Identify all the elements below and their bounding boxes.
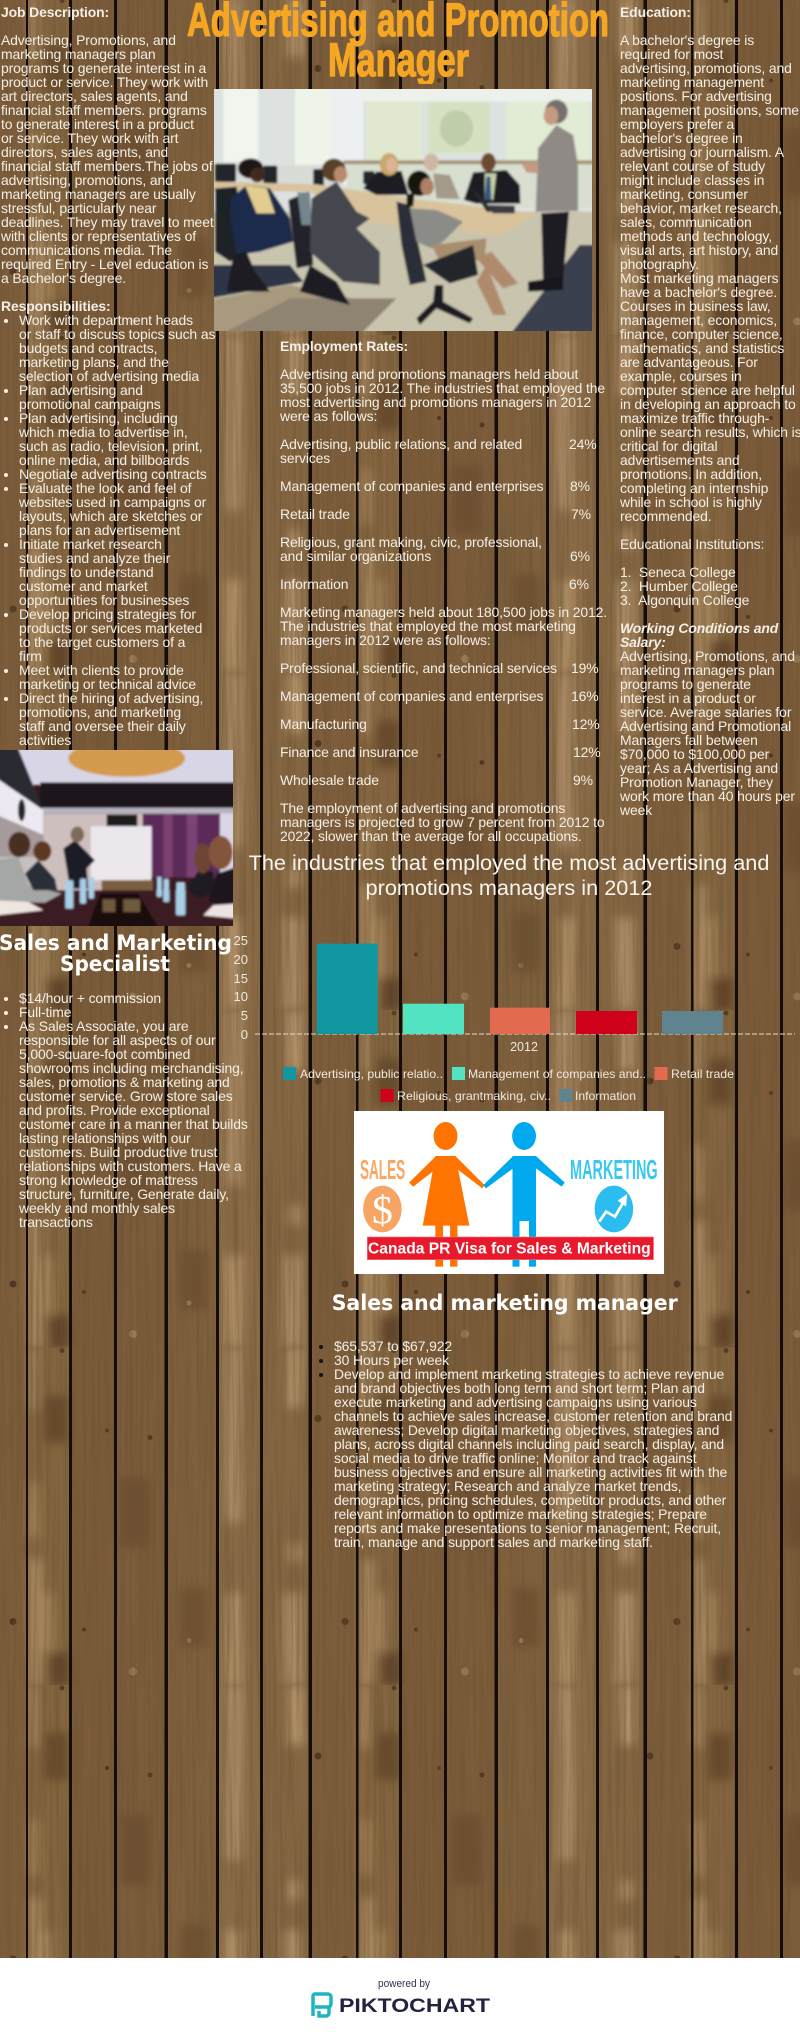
footer: powered by Piktochart: PIKTOCHART bbox=[339, 1995, 490, 2017]
heading: Sales and Marketing Specialist bbox=[0, 931, 232, 976]
seated older woman bbox=[424, 154, 460, 199]
left column: job description: product or service. They work with bbox=[1, 74, 208, 90]
table: marketing managers by industry: 12% bbox=[572, 716, 600, 732]
sales and marketing specialist details: lasting relationships with our bbox=[19, 1130, 190, 1146]
left column: responsibilities: such as radio, television, print, bbox=[19, 438, 203, 454]
left column: responsibilities: staff and oversee their daily bbox=[19, 718, 186, 734]
table: advertising and promotions managers by industry: 6% bbox=[569, 576, 589, 592]
left column: job description: financial staff members. programs bbox=[1, 102, 207, 118]
right column: education, institutions, working conditions: bachelor's degree in bbox=[620, 130, 743, 146]
bar chart: 2012 bbox=[510, 1040, 538, 1054]
sales and marketing specialist details: customers. Build productive trust bbox=[19, 1144, 217, 1160]
left column: responsibilities: budgets and contracts, bbox=[19, 340, 157, 356]
table: marketing managers by industry bbox=[280, 660, 601, 788]
seated woman in navy bbox=[215, 158, 293, 292]
photo: conference room presentation bbox=[0, 750, 233, 926]
image: sales and marketing figures bbox=[354, 1111, 664, 1274]
right column: education, institutions, working conditions: methods and technology, bbox=[620, 228, 772, 244]
sales and marketing specialist details: relationships with customers. Have a bbox=[19, 1158, 242, 1174]
table: marketing managers by industry: Professional, scientific, and technical services bbox=[280, 660, 557, 676]
right column: education, institutions, working conditions: while in school is highly bbox=[620, 494, 762, 510]
right column: education, institutions, working conditions: photography. bbox=[620, 256, 699, 272]
right column: education, institutions, working conditions: marketing, consumer bbox=[620, 186, 748, 202]
right column: education, institutions, working conditions: interest in a product or bbox=[620, 690, 756, 706]
left column: job description: Advertising, Promotions, and bbox=[1, 32, 176, 48]
left column: job description: advertising, promotions, and bbox=[1, 172, 173, 188]
sales and marketing specialist details bbox=[4, 990, 248, 1230]
right column: education, institutions, working conditions: $70,000 to $100,000 per bbox=[620, 746, 769, 762]
right column: education, institutions, working conditions: positions. For advertising bbox=[620, 88, 772, 104]
left column: job description: directors, sales agents, and bbox=[1, 144, 168, 160]
right column: education, institutions, working conditions: promotions. In addition, bbox=[620, 466, 762, 482]
right column: education, institutions, working conditions: computer science are helpful bbox=[620, 382, 795, 398]
sales and marketing manager details: execute marketing and advertising campaigns using various bbox=[334, 1394, 697, 1410]
right column: education, institutions, working conditions: relevant course of study bbox=[620, 158, 765, 174]
table: marketing managers by industry: Manufacturing bbox=[280, 716, 367, 732]
left column: responsibilities bbox=[1, 298, 215, 748]
middle column: marketing managers paragraph bbox=[280, 604, 607, 648]
left column: responsibilities: Meet with clients to provide bbox=[19, 662, 184, 678]
right column: education, institutions, working conditions: sales, communication bbox=[620, 214, 752, 230]
sales and marketing specialist details: Full-time bbox=[19, 1004, 71, 1020]
right column: education, institutions, working conditions: example, courses in bbox=[620, 368, 742, 384]
sales and marketing manager details: awareness; Develop digital marketing objectives, strategies and bbox=[334, 1422, 719, 1438]
seated woman in stripes bbox=[397, 171, 518, 325]
table: marketing managers by industry: 19% bbox=[571, 660, 599, 676]
sales and marketing specialist details: customer care in a manner that builds bbox=[19, 1116, 248, 1132]
right column: education, institutions, working conditions: service. Average salaries for bbox=[620, 704, 791, 720]
seated blonde woman bbox=[363, 153, 409, 195]
right column: education, institutions, working conditions: marketing managers plan bbox=[620, 662, 775, 678]
bar chart: 10 bbox=[234, 989, 248, 1004]
sales and marketing manager details: marketing strategy; Research and analyze market trends, bbox=[334, 1478, 681, 1494]
right column: education, institutions, working conditions: management, economics, bbox=[620, 312, 777, 328]
seated man in gray suit bbox=[288, 159, 380, 305]
footer: powered by Piktochart: powered by bbox=[378, 1978, 430, 1990]
left column: responsibilities: activities bbox=[19, 732, 71, 748]
left column: job description: marketing managers plan bbox=[1, 46, 156, 62]
sales and marketing specialist details: weekly and monthly sales bbox=[19, 1200, 175, 1216]
middle column: employment rates intro: Employment Rates: bbox=[280, 338, 408, 354]
left column: responsibilities: or staff to discuss topics such as bbox=[19, 326, 215, 342]
left column: responsibilities: promotions, and marketing bbox=[19, 704, 181, 720]
sales and marketing manager details: channels to achieve sales increase, customer retention and brand bbox=[334, 1408, 732, 1424]
middle column: employment rates intro bbox=[280, 338, 605, 424]
banner: Canada PR Visa for Sales & Marketing bbox=[368, 1241, 651, 1258]
right column: education, institutions, working conditions: required for most bbox=[620, 46, 723, 62]
sales and marketing specialist details: and profits. Provide exceptional bbox=[19, 1102, 210, 1118]
bar chart: 5 bbox=[241, 1008, 248, 1023]
right column: education, institutions, working conditions: advertisements and bbox=[620, 452, 739, 468]
right column: education, institutions, working conditions: Advertising and Promotional bbox=[620, 718, 791, 734]
sales and marketing manager details: relevant information to optimize marketing strategies; Prepare bbox=[334, 1506, 707, 1522]
sales and marketing specialist details: responsible for all aspects of our bbox=[19, 1032, 216, 1048]
left column: responsibilities: Direct the hiring of advertising, bbox=[19, 690, 203, 706]
right column: education, institutions, working conditions: maximize traffic through- bbox=[620, 410, 769, 426]
blue figure bbox=[483, 1122, 565, 1267]
left column: responsibilities: Plan advertising and bbox=[19, 382, 143, 398]
sales and marketing specialist details: strong knowledge of mattress bbox=[19, 1172, 198, 1188]
sales and marketing specialist details: sales, promotions & marketing and bbox=[19, 1074, 230, 1090]
sales and marketing manager details: social media to drive traffic online; Monitor and track against bbox=[334, 1450, 696, 1466]
table: marketing managers by industry: 12% bbox=[573, 744, 601, 760]
left column: responsibilities: websites used in campaigns or bbox=[19, 494, 206, 510]
left column: job description: to generate interest in a product bbox=[1, 116, 194, 132]
table: advertising and promotions managers by industry: 6% bbox=[570, 548, 590, 564]
table: marketing managers by industry: 9% bbox=[573, 772, 593, 788]
left column: job description: programs to generate interest in a bbox=[1, 60, 206, 76]
left column: responsibilities: selection of advertising media bbox=[19, 368, 199, 384]
seated man in gray suit bbox=[0, 832, 62, 903]
table: advertising and promotions managers by industry: Retail trade bbox=[280, 506, 350, 522]
left column: responsibilities: layouts, which are sketches or bbox=[19, 508, 202, 524]
sales and marketing manager details: plans, across digital channels including paid search, display, and bbox=[334, 1436, 724, 1452]
left column: responsibilities: opportunities for businesses bbox=[19, 592, 189, 608]
left column: responsibilities: Evaluate the look and feel of bbox=[19, 480, 191, 496]
right column: education, institutions, working conditions: Advertising, Promotions, and bbox=[620, 648, 795, 664]
right column: education, institutions, working conditions: completing an internship bbox=[620, 480, 768, 496]
bar chart: 20 bbox=[234, 952, 248, 967]
right column: education, institutions, working conditions: Most marketing managers bbox=[620, 270, 778, 286]
chart title: The industries that employed the most advertising and bbox=[249, 850, 769, 874]
sales and marketing specialist details: $14/hour + commission bbox=[19, 990, 161, 1006]
heading: Sales and Marketing Specialist: Sales and Marketing bbox=[0, 931, 232, 955]
standing presenter bbox=[521, 100, 578, 292]
table: advertising and promotions managers by industry: and similar organizations bbox=[280, 548, 431, 564]
seated women on right bbox=[187, 836, 237, 907]
right column: education, institutions, working conditions: have a bachelor's degree. bbox=[620, 284, 777, 300]
table: marketing managers by industry: Management of companies and enterprises bbox=[280, 688, 543, 704]
sales and marketing manager details: and brand objectives both long term and short term; Plan and bbox=[334, 1380, 705, 1396]
legend: Information bbox=[575, 1089, 636, 1103]
left column: responsibilities: Work with department heads bbox=[19, 312, 193, 328]
left column: responsibilities: products or services marketed bbox=[19, 620, 202, 636]
left column: responsibilities: Initiate market research bbox=[19, 536, 162, 552]
sales and marketing manager details: reports and make presentations to senior management; Recruit, bbox=[334, 1520, 721, 1536]
right column: education, institutions, working conditions: Education: bbox=[620, 4, 691, 20]
left column: job description: Job Description: bbox=[1, 4, 109, 20]
middle column: employment rates intro: 35,500 jobs in 2012. The industries that employed the bbox=[280, 380, 605, 396]
right column: education, institutions, working conditions: year; As a Advertising and bbox=[620, 760, 778, 776]
right column: education, institutions, working conditions: might include classes in bbox=[620, 172, 764, 188]
right column: education, institutions, working conditions: week bbox=[620, 802, 652, 818]
left column: job description: required Entry - Level education is bbox=[1, 256, 208, 272]
right column: education, institutions, working conditions: advertising, promotions, and bbox=[620, 60, 792, 76]
left column: responsibilities: findings to understand bbox=[19, 564, 154, 580]
table: advertising and promotions managers by industry: 8% bbox=[570, 478, 590, 494]
left column: job description bbox=[1, 4, 214, 286]
right column: education, institutions, working conditions: 3. Algonquin College bbox=[620, 592, 749, 608]
sales and marketing manager details bbox=[319, 1338, 732, 1550]
left column: responsibilities: marketing plans, and the bbox=[19, 354, 169, 370]
table: advertising and promotions managers by industry: services bbox=[280, 450, 330, 466]
right column: education, institutions, working conditions: Educational Institutions: bbox=[620, 536, 764, 552]
icon: growth arrow bbox=[595, 1186, 633, 1232]
middle column: employment rates intro: Advertising and promotions managers held about bbox=[280, 366, 578, 382]
middle column: marketing managers paragraph: The industries that employed the most marketing bbox=[280, 618, 576, 634]
sales and marketing manager details: demographics, pricing schedules, competitor products, and other bbox=[334, 1492, 726, 1508]
heading: Sales and marketing manager: Sales and marketing manager bbox=[332, 1291, 678, 1315]
table: marketing managers by industry: 16% bbox=[571, 688, 599, 704]
left column: responsibilities: which media to advertise in, bbox=[19, 424, 188, 440]
bar chart bbox=[234, 933, 795, 1103]
right column: education, institutions, working conditions: 1. Seneca College bbox=[620, 564, 736, 580]
bar chart: 0 bbox=[241, 1027, 248, 1042]
legend: Religious, grantmaking, civ.. bbox=[397, 1089, 551, 1103]
table: advertising and promotions managers by industry bbox=[280, 436, 597, 592]
icon: dollar coin: $ bbox=[372, 1187, 393, 1232]
left column: responsibilities: Responsibilities: bbox=[1, 298, 110, 314]
table: advertising and promotions managers by industry: Information bbox=[280, 576, 348, 592]
bar chart: 25 bbox=[234, 933, 248, 948]
orange figure bbox=[409, 1122, 484, 1267]
right column: education, institutions, working conditions: Working Conditions and bbox=[620, 620, 778, 636]
right column: education, institutions, working conditions: 2. Humber College bbox=[620, 578, 738, 594]
left column: responsibilities: promotional campaigns bbox=[19, 396, 161, 412]
right column: education, institutions, working conditions: finance, computer science, bbox=[620, 326, 783, 342]
right column: education, institutions, working conditions: programs to generate bbox=[620, 676, 751, 692]
left column: job description: art directors, sales agents, and bbox=[1, 88, 188, 104]
right column: education, institutions, working conditions: work more than 40 hours per bbox=[620, 788, 795, 804]
sales and marketing manager details: business objectives and ensure all marketing activities fit with the bbox=[334, 1464, 727, 1480]
icon: Piktochart logo bbox=[313, 1994, 331, 2016]
bars bbox=[317, 944, 723, 1034]
table: marketing managers by industry: Wholesale trade bbox=[280, 772, 379, 788]
sales and marketing manager details: Develop and implement marketing strategies to achieve revenue bbox=[334, 1366, 724, 1382]
right column: education, institutions, working conditions: online search results, which is bbox=[620, 424, 800, 440]
right column: education, institutions, working conditions: advertising or journalism. A bbox=[620, 144, 784, 160]
left column: responsibilities: to the target customers of a bbox=[19, 634, 185, 650]
seated man in dark suit bbox=[25, 841, 57, 890]
footer: powered by Piktochart bbox=[311, 1978, 490, 2018]
left column: responsibilities: Plan advertising, including bbox=[19, 410, 178, 426]
table: advertising and promotions managers by industry: 7% bbox=[571, 506, 591, 522]
sales and marketing specialist details: showrooms including merchandising, bbox=[19, 1060, 243, 1076]
presenter bbox=[63, 826, 95, 889]
title bbox=[187, 0, 609, 84]
middle column: employment outlook: 2022, slower than the average for all occupations. bbox=[280, 828, 582, 844]
table: advertising and promotions managers by industry: Advertising, public relations, and related bbox=[280, 436, 522, 452]
right column: education, institutions, working conditions bbox=[620, 4, 800, 818]
chart title: promotions managers in 2012 bbox=[366, 874, 652, 900]
heading: Sales and Marketing Specialist: Specialist bbox=[60, 952, 170, 976]
right column: education, institutions, working conditions: recommended. bbox=[620, 508, 712, 524]
seated man in dark suit bbox=[464, 153, 520, 213]
sales and marketing manager details: $65,537 to $67,922 bbox=[334, 1338, 452, 1354]
left column: responsibilities: plans for an advertisement bbox=[19, 522, 180, 538]
sales and marketing specialist details: As Sales Associate, you are bbox=[19, 1018, 189, 1034]
image: sales and marketing figures: SALES bbox=[360, 1155, 405, 1186]
right column: education, institutions, working conditions: employers prefer a bbox=[620, 116, 734, 132]
right column: education, institutions, working conditions: Salary: bbox=[620, 634, 666, 650]
sales and marketing manager details: train, manage and support sales and marketing staff. bbox=[334, 1534, 653, 1550]
middle column: employment outlook: The employment of advertising and promotions bbox=[280, 800, 565, 816]
left column: job description: with clients or representatives of bbox=[1, 228, 196, 244]
left column: responsibilities: customer and market bbox=[19, 578, 148, 594]
right column: education, institutions, working conditions: Promotion Manager, they bbox=[620, 774, 773, 790]
icon: dollar coin bbox=[363, 1186, 402, 1232]
left column: job description: or service. They work with art bbox=[1, 130, 178, 146]
sales and marketing specialist details: transactions bbox=[19, 1214, 93, 1230]
right column: education, institutions, working conditions: A bachelor's degree is bbox=[620, 32, 754, 48]
photo: business meeting with standing presenter bbox=[214, 89, 592, 331]
legend: Retail trade bbox=[671, 1067, 734, 1081]
left column: responsibilities: Negotiate advertising contracts bbox=[19, 466, 207, 482]
middle column: employment outlook bbox=[280, 800, 605, 844]
left column: responsibilities: online media, and billboards bbox=[19, 452, 189, 468]
left column: responsibilities: marketing or technical advice bbox=[19, 676, 196, 692]
right column: education, institutions, working conditions: Courses in business law, bbox=[620, 298, 771, 314]
legend: Advertising, public relatio.. bbox=[300, 1067, 443, 1081]
left column: responsibilities: firm bbox=[19, 648, 42, 664]
legend: Management of companies and.. bbox=[468, 1067, 646, 1081]
left column: job description: deadlines. They may travel to meet bbox=[1, 214, 214, 230]
bar chart: 15 bbox=[234, 971, 248, 986]
left column: job description: marketing managers are usually bbox=[1, 186, 196, 202]
left column: job description: a Bachelor's degree. bbox=[1, 270, 126, 286]
chart title bbox=[249, 850, 769, 900]
right column: education, institutions, working conditions: critical for digital bbox=[620, 438, 718, 454]
left column: job description: communications media. The bbox=[1, 242, 172, 258]
middle column: employment rates intro: most advertising and promotions managers in 2012 bbox=[280, 394, 591, 410]
right column: education, institutions, working conditions: in developing an approach to bbox=[620, 396, 796, 412]
legend bbox=[283, 1067, 734, 1103]
table: advertising and promotions managers by industry: 24% bbox=[569, 436, 597, 452]
sales and marketing manager details: 30 Hours per week bbox=[334, 1352, 449, 1368]
right column: education, institutions, working conditions: mathematics, and statistics bbox=[620, 340, 784, 356]
right column: education, institutions, working conditions: are advantageous. For bbox=[620, 354, 758, 370]
middle column: marketing managers paragraph: Marketing managers held about 180,500 jobs in 2012. bbox=[280, 604, 607, 620]
table: marketing managers by industry: Finance and insurance bbox=[280, 744, 418, 760]
left column: job description: stressful, particularly near bbox=[1, 200, 156, 216]
right column: education, institutions, working conditions: Managers fall between bbox=[620, 732, 758, 748]
sales and marketing specialist details: structure, furniture, Generate daily, bbox=[19, 1186, 229, 1202]
right column: education, institutions, working conditions: visual arts, art history, and bbox=[620, 242, 778, 258]
left column: responsibilities: studies and analyze their bbox=[19, 550, 170, 566]
right column: education, institutions, working conditions: management positions, some bbox=[620, 102, 799, 118]
middle column: marketing managers paragraph: managers in 2012 were as follows: bbox=[280, 632, 491, 648]
sales and marketing specialist details: customer service. Grow store sales bbox=[19, 1088, 233, 1104]
table: advertising and promotions managers by industry: Management of companies and enterprises bbox=[280, 478, 543, 494]
table: advertising and promotions managers by industry: Religious, grant making, civic, professional, bbox=[280, 534, 542, 550]
left column: job description: financial staff members.The jobs of bbox=[1, 158, 213, 174]
middle column: employment rates intro: were as follows: bbox=[280, 408, 377, 424]
left column: responsibilities: Develop pricing strategies for bbox=[19, 606, 196, 622]
right column: education, institutions, working conditions: behavior, market research, bbox=[620, 200, 782, 216]
middle column: employment outlook: managers is projected to grow 7 percent from 2012 to bbox=[280, 814, 605, 830]
right column: education, institutions, working conditions: marketing management bbox=[620, 74, 764, 90]
sales and marketing specialist details: 5,000-square-foot combined bbox=[19, 1046, 190, 1062]
